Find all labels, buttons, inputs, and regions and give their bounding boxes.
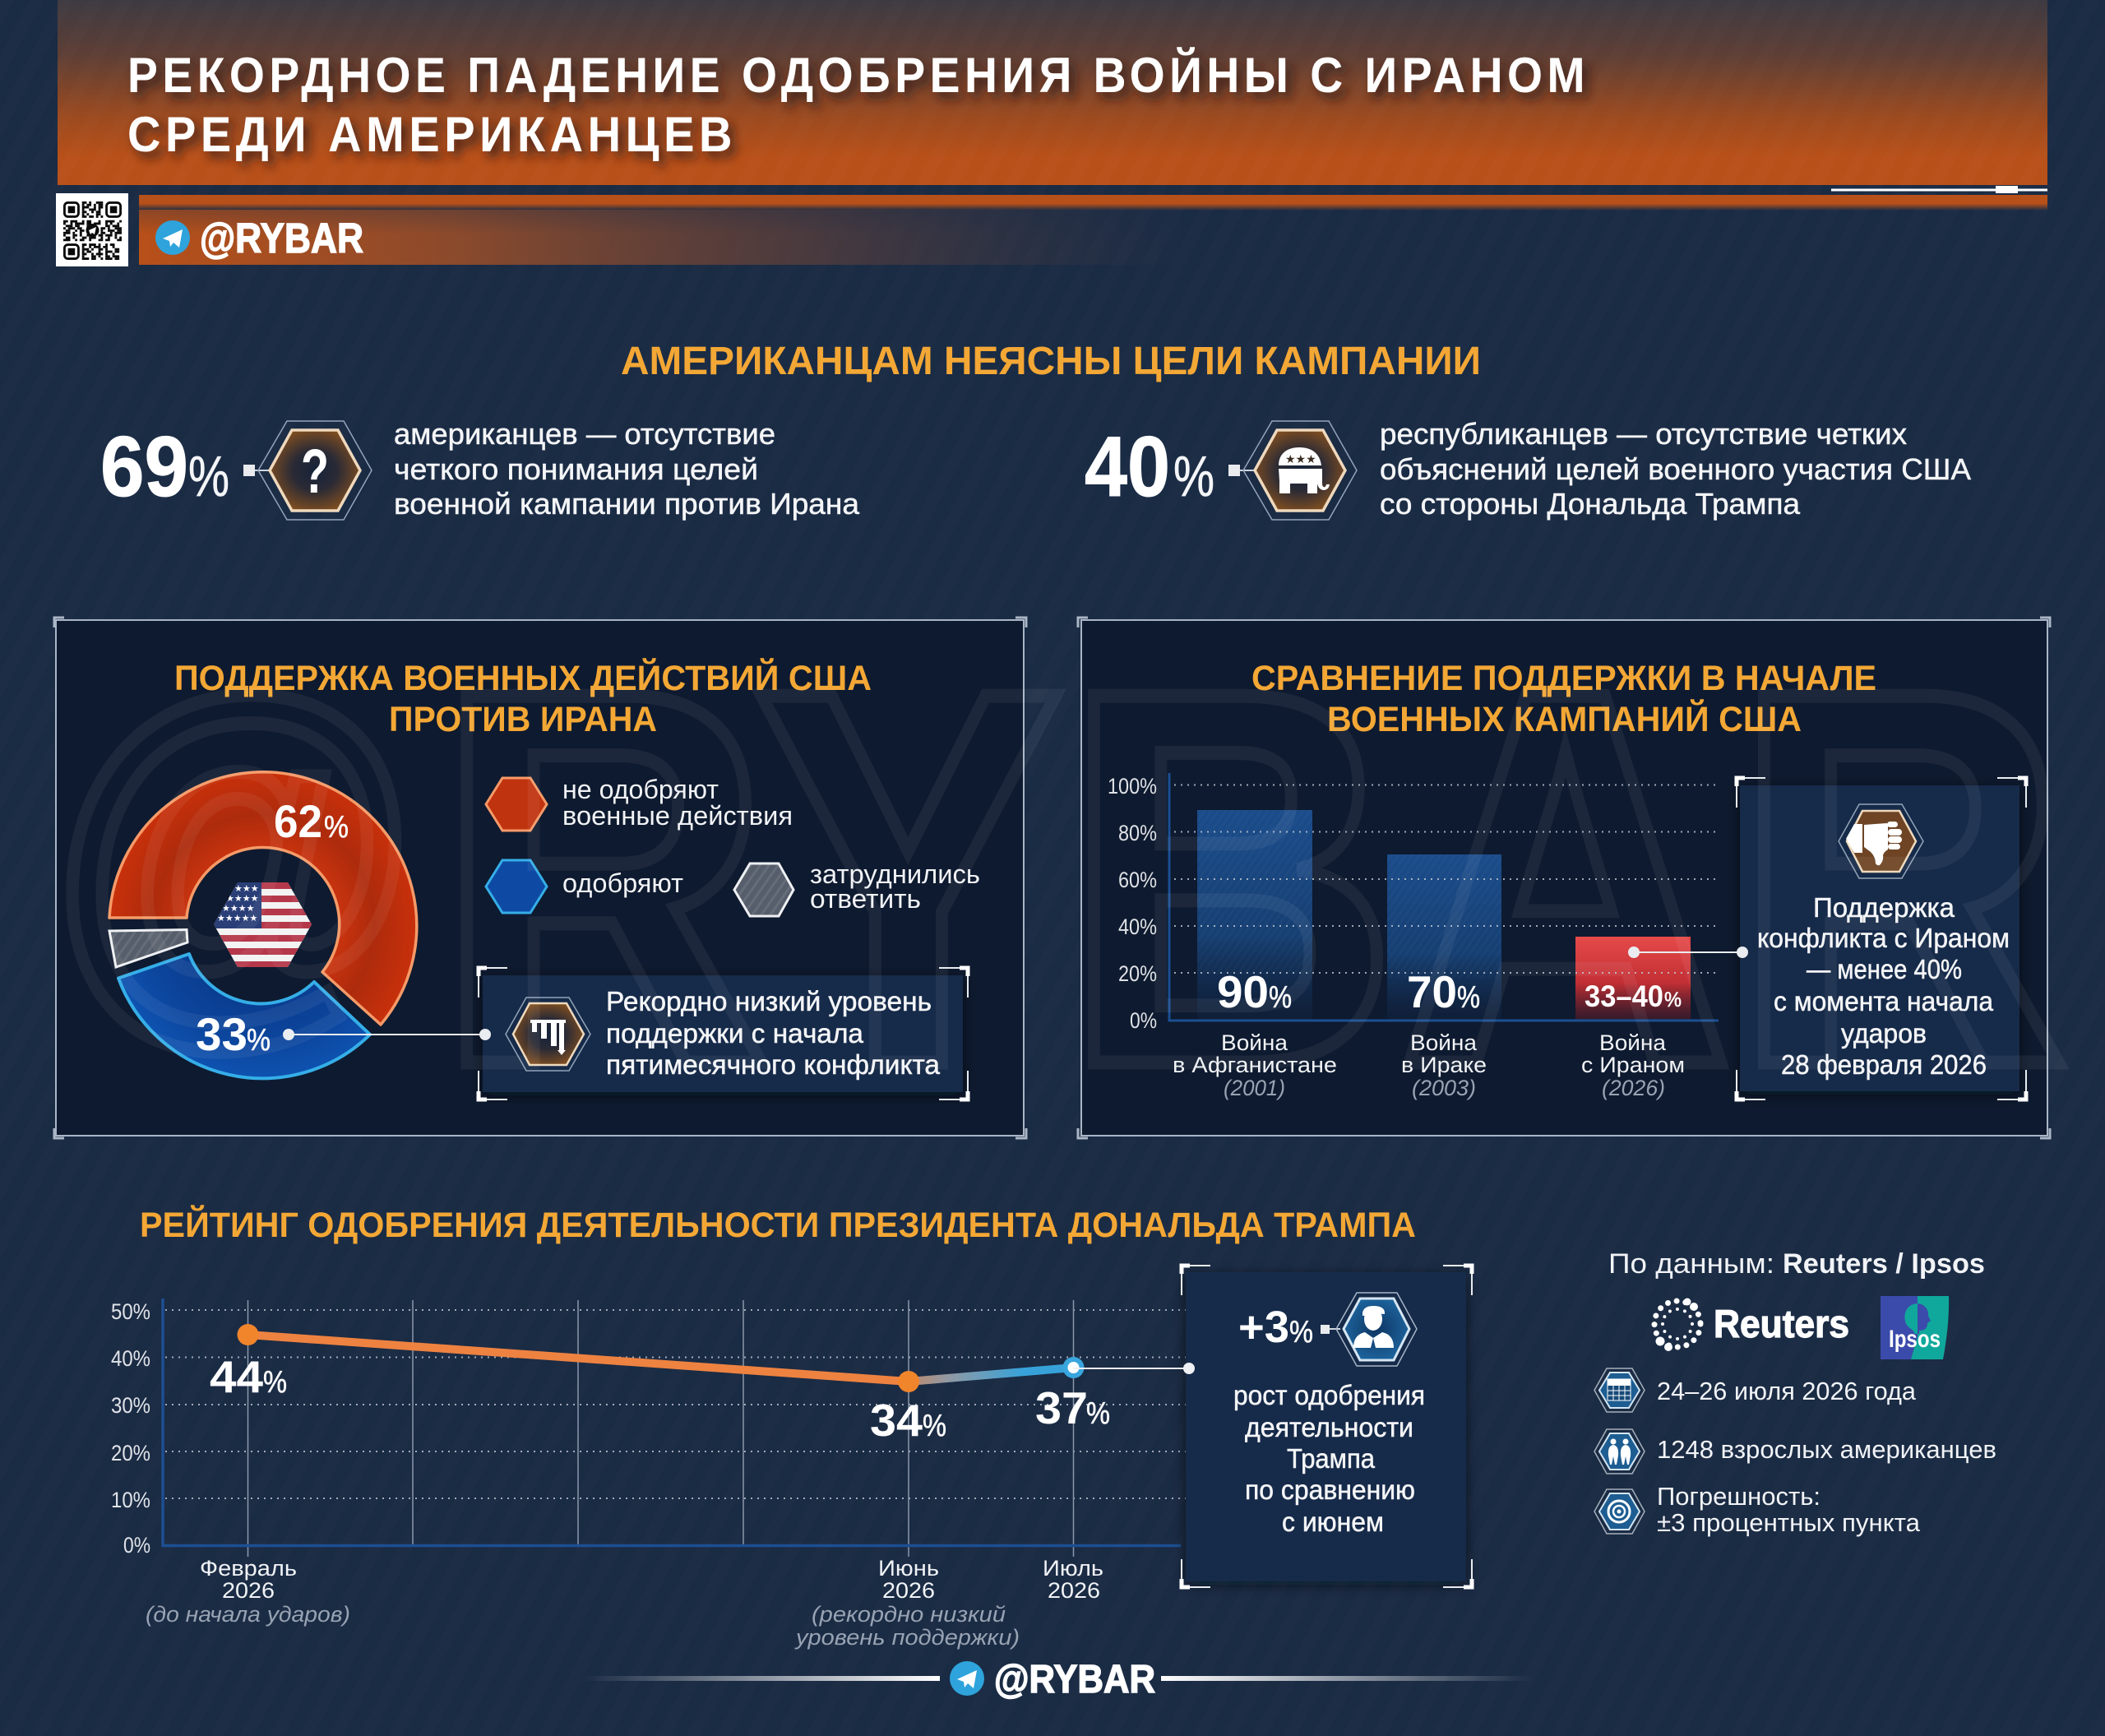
x axis labels: Июнь: [878, 1556, 939, 1581]
text: americans: четкого понимания целей: [394, 452, 758, 486]
callout text: поддержки с начала: [606, 1018, 864, 1049]
value: [1238, 1303, 1340, 1352]
title: [127, 48, 1589, 162]
callout text: по сравнению: [1245, 1474, 1415, 1505]
callout text: пятимесячного конфликта: [606, 1049, 941, 1080]
y axis labels: [1108, 774, 1157, 1033]
callout: conflict support: [1737, 778, 2026, 1099]
label: 33 percent: 33: [196, 1008, 248, 1060]
leader line from July point: [1074, 1363, 1195, 1374]
callout text: Рекордно низкий уровень: [606, 986, 932, 1016]
x axis labels: (рекордно низкий: [812, 1602, 1006, 1627]
label: 62 percent: %: [324, 810, 349, 845]
y axis labels: 20%: [1118, 961, 1157, 986]
x axis labels: 2026: [882, 1578, 935, 1603]
stat: 69 percent: [100, 417, 860, 521]
data values: %: [1086, 1396, 1110, 1431]
callout text: [1757, 892, 2010, 1080]
data values: 37: [1035, 1382, 1088, 1433]
stat: 40 percent: %: [1173, 444, 1214, 508]
bar chart: [1108, 773, 1719, 1100]
text: americans: военной кампании против Ирана: [394, 487, 860, 521]
logo: Ipsos: [1881, 1296, 1949, 1359]
logo: Reuters: [1654, 1298, 1849, 1351]
stat: 40 percent: [1085, 417, 1971, 521]
panel: comparison of support: [1078, 618, 2050, 1138]
bar values: 33–40: [1585, 979, 1663, 1013]
x axis labels: [146, 1556, 1103, 1650]
y axis labels: 80%: [1118, 821, 1157, 845]
icon: us flag hexagon: ★★★★: [222, 903, 255, 914]
item: dates: [1594, 1368, 1917, 1412]
logo: Reuters: Reuters: [1714, 1302, 1849, 1345]
y axis labels: 100%: [1108, 774, 1157, 799]
icon: republican elephant hexagon: [1243, 421, 1357, 520]
icon: us flag hexagon: [212, 881, 314, 969]
item: margin of error: ±3 процентных пункта: [1657, 1508, 1921, 1537]
panel heading: [174, 658, 872, 739]
y axis labels: 60%: [1118, 868, 1157, 892]
y axis labels: 0%: [1130, 1008, 1157, 1033]
icon: republican elephant hexagon: ★★★: [1285, 453, 1316, 466]
data values: [210, 1351, 1110, 1446]
panel heading: ВОЕННЫХ КАМПАНИЙ США: [1327, 699, 1802, 739]
bar values: %: [1664, 988, 1682, 1012]
text: americans: [394, 417, 860, 521]
panel heading: ПОДДЕРЖКА ВОЕННЫХ ДЕЙСТВИЙ США: [174, 658, 872, 698]
sources heading: По данным:: [1608, 1248, 1774, 1280]
item: margin of error: [1594, 1482, 1921, 1537]
section heading: goals: АМЕРИКАНЦАМ НЕЯСНЫ ЦЕЛИ КАМПАНИИ: [621, 340, 1481, 383]
x axis labels: с Ираном: [1581, 1053, 1685, 1077]
legend: ответить: [810, 884, 921, 914]
item: respondents: 1248 взрослых американцев: [1657, 1435, 1996, 1464]
x axis labels: уровень поддержки): [794, 1625, 1020, 1650]
y axis labels: 10%: [111, 1488, 150, 1512]
bar values: 70: [1407, 966, 1457, 1017]
data values: 44: [210, 1351, 263, 1402]
callout text: рост одобрения: [1233, 1380, 1425, 1410]
callout text: деятельности: [1245, 1412, 1413, 1442]
item: margin of error: Погрешность:: [1657, 1482, 1820, 1511]
legend: затруднились: [810, 859, 980, 889]
text: republicans: республиканцев — отсутствие четких: [1380, 417, 1907, 451]
stat: 69 percent: %: [188, 444, 229, 508]
bars: [1197, 810, 1691, 1021]
donut chart: [109, 772, 417, 1078]
item: respondents: [1594, 1429, 1996, 1474]
watermark: @: [51, 614, 417, 1074]
value: %: [1289, 1315, 1313, 1349]
logo text: @RYBAR: [994, 1658, 1155, 1701]
sources heading: [1608, 1248, 1985, 1280]
y axis labels: 30%: [111, 1393, 150, 1418]
text: republicans: [1380, 417, 1971, 521]
panel heading: [1251, 659, 1876, 739]
bar values: %: [1269, 980, 1292, 1015]
legend: [486, 775, 980, 916]
stat: 69 percent: 69: [100, 419, 188, 515]
label: 62 percent: [274, 795, 349, 847]
header accent stripes: [139, 186, 2047, 211]
legend: одобряют: [562, 868, 683, 898]
callout text: [606, 986, 941, 1080]
logo text: @RYBAR: [200, 215, 363, 262]
QR code: [56, 193, 128, 266]
line chart: [111, 1299, 1186, 1650]
x axis labels: Февраль: [200, 1556, 297, 1581]
x axis labels: 2026: [222, 1578, 275, 1603]
y axis labels: 0%: [123, 1533, 150, 1558]
x axis labels: (2026): [1602, 1076, 1665, 1100]
icon: us flag hexagon: ★★★★★: [217, 913, 257, 924]
callout text: ударов: [1841, 1018, 1927, 1049]
y axis labels: 40%: [111, 1346, 150, 1371]
y axis labels: 20%: [111, 1441, 150, 1465]
x axis labels: (2001): [1224, 1076, 1285, 1100]
icon: person hexagon: [1336, 1293, 1417, 1366]
stat: 40 percent: 40: [1085, 419, 1170, 515]
panel heading: СРАВНЕНИЕ ПОДДЕРЖКИ В НАЧАЛЕ: [1251, 659, 1876, 698]
panel: support for military action: [54, 618, 1026, 1138]
leader line to callout: [1628, 947, 1748, 958]
section heading: approval rating: РЕЙТИНГ ОДОБРЕНИЯ ДЕЯТЕЛЬНОСТИ ПРЕЗИДЕНТА ДОНАЛЬДА ТРАМПА: [140, 1205, 1416, 1245]
y axis labels: [111, 1299, 150, 1558]
text: americans: американцев — отсутствие: [394, 417, 775, 451]
text: republicans: объяснений целей военного участия США: [1380, 452, 1971, 486]
panel heading: ПРОТИВ ИРАНА: [389, 700, 657, 739]
title: РЕКОРДНОЕ ПАДЕНИЕ ОДОБРЕНИЯ ВОЙНЫ С ИРАНОМ: [127, 48, 1589, 103]
x axis labels: в Афганистане: [1173, 1053, 1337, 1077]
callout text: Трампа: [1287, 1443, 1376, 1474]
label: 33 percent: [196, 1008, 271, 1060]
icon: question hexagon: ?: [301, 437, 329, 507]
callout: plus 3 percent: [1074, 1266, 1472, 1587]
data values: %: [263, 1365, 287, 1400]
x axis labels: 2026: [1048, 1578, 1100, 1603]
icon: thumb down hexagon: [1839, 804, 1923, 878]
text: republicans: со стороны Дональда Трампа: [1380, 487, 1801, 521]
x axis labels: [1173, 1030, 1685, 1100]
value: +3: [1238, 1303, 1289, 1352]
callout text: с июнем: [1282, 1507, 1384, 1537]
icon: question hexagon: [258, 421, 372, 520]
x axis labels: Война: [1221, 1030, 1288, 1055]
icon: us flag hexagon: ★★★★: [226, 893, 259, 904]
x axis labels: (2003): [1412, 1076, 1476, 1100]
label: 62 percent: 62: [274, 795, 322, 847]
icon: telegram: [155, 220, 190, 255]
x axis labels: Июль: [1043, 1556, 1103, 1581]
legend: военные действия: [562, 801, 793, 831]
data line: [237, 1324, 1084, 1392]
callout text: 28 февраля 2026: [1781, 1049, 1987, 1080]
item: dates: 24–26 июля 2026 года: [1657, 1377, 1917, 1405]
callout text: [1233, 1380, 1425, 1537]
leader line to callout: [283, 1029, 491, 1040]
icon: telegram: [950, 1661, 984, 1696]
x axis labels: в Ираке: [1401, 1053, 1487, 1077]
title: СРЕДИ АМЕРИКАНЦЕВ: [127, 107, 737, 162]
data values: %: [923, 1409, 946, 1443]
callout text: конфликта с Ираном: [1757, 923, 2010, 953]
callout: record low: [479, 968, 968, 1099]
x axis labels: (до начала ударов): [146, 1602, 350, 1627]
logo band: [139, 210, 1191, 265]
header banner: [58, 0, 2047, 185]
bar values: %: [1457, 980, 1480, 1015]
callout text: Поддержка: [1813, 892, 1955, 923]
bar values: 90: [1217, 966, 1269, 1017]
sources block: [1594, 1248, 1996, 1537]
sources heading: Reuters / Ipsos: [1783, 1248, 1985, 1280]
data values: 34: [870, 1395, 923, 1446]
legend: не одобряют: [562, 775, 719, 804]
logo: Ipsos: Ipsos: [1889, 1326, 1941, 1353]
x axis labels: Война: [1599, 1030, 1667, 1055]
callout text: — менее 40%: [1807, 954, 1962, 984]
bar values: [1217, 966, 1682, 1017]
footer logo: [583, 1658, 1534, 1701]
icon: us flag hexagon: ★★★: [234, 883, 259, 894]
icon: falling bars hexagon: [506, 998, 590, 1071]
y axis labels: 50%: [111, 1299, 150, 1324]
y axis labels: 40%: [1118, 914, 1157, 939]
label: 33 percent: %: [247, 1023, 271, 1058]
x axis labels: Война: [1410, 1030, 1478, 1055]
callout text: с момента начала: [1774, 986, 1994, 1016]
